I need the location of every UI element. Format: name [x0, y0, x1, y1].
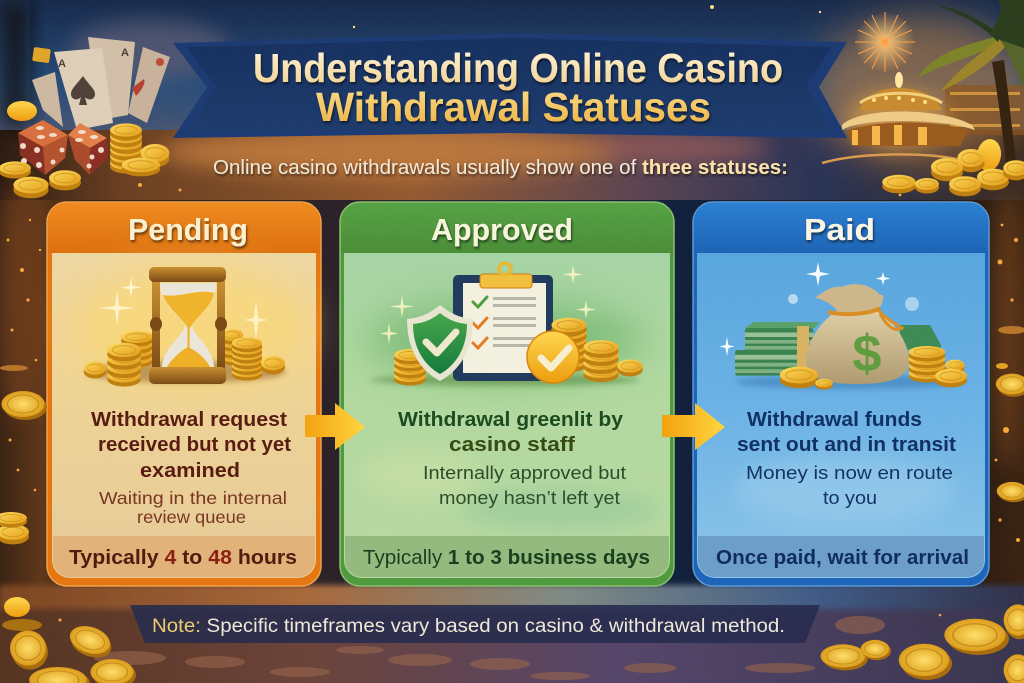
pending description: examined	[140, 460, 240, 482]
approved header	[341, 203, 673, 253]
illustration: casino building	[822, 72, 975, 163]
sparkles	[99, 277, 268, 340]
pending body background	[52, 253, 316, 578]
approved detail	[423, 462, 626, 508]
icon: money bag with cash and coins	[735, 284, 967, 390]
illustration: fireworks	[855, 12, 915, 72]
approved description: casino staff	[449, 434, 575, 456]
title text	[253, 45, 783, 130]
approved description	[398, 409, 624, 456]
pending header	[48, 203, 320, 253]
panel: pending	[47, 202, 321, 586]
approved detail: money hasn’t left yet	[439, 487, 620, 508]
paid detail: to you	[823, 487, 877, 508]
paid detail: Money is now en route	[746, 462, 953, 483]
illustration: playing cards: A	[58, 58, 66, 70]
pending timeframe: Typically 4 to 48 hours	[69, 547, 297, 569]
pending description: received but not yet	[98, 434, 291, 456]
subtitle: Online casino withdrawals usually show one of three statuses:	[213, 157, 788, 179]
pending footer band	[53, 536, 315, 577]
approved footer band	[345, 536, 669, 577]
title text: Understanding Online Casino	[253, 45, 783, 91]
approved body background	[344, 253, 670, 578]
title banner	[173, 33, 847, 138]
gold coins bottom right	[820, 604, 1024, 683]
illustration: dice	[18, 120, 108, 175]
note bar	[130, 605, 820, 643]
paid footer band	[698, 536, 984, 577]
approved description: Withdrawal greenlit by	[398, 409, 624, 431]
paid header	[694, 203, 988, 253]
paid detail	[746, 462, 953, 508]
paid heading: Paid	[804, 212, 875, 247]
side coins right	[996, 363, 1024, 502]
illustration: playing cards: A	[121, 47, 129, 59]
pending detail: review queue	[137, 507, 246, 527]
sparkles	[380, 265, 596, 344]
icon: money bag with cash and coins: $	[853, 325, 882, 383]
illustration: gold coins top right	[882, 137, 1024, 196]
illustration: palm tree	[918, 0, 1024, 162]
note text: Note: Specific timeframes vary based on casino & withdrawal method.	[152, 616, 785, 637]
arrow: approved to paid	[662, 403, 725, 450]
icon: hourglass with coins	[84, 267, 286, 387]
approved detail: Internally approved but	[423, 462, 626, 483]
approved timeframe: Typically 1 to 3 business days	[363, 547, 650, 569]
paid description: Withdrawal funds	[747, 409, 922, 431]
paid description: sent out and in transit	[737, 434, 956, 456]
illustration: gold coins top left	[0, 47, 169, 198]
panel: approved	[340, 202, 674, 586]
paid description	[737, 409, 956, 456]
side coins left	[0, 391, 47, 544]
pending heading: Pending	[128, 212, 248, 247]
paid body background	[697, 253, 985, 578]
icon: clipboard, shield and check coin	[370, 263, 643, 386]
illustration: distant hotel	[945, 85, 1024, 135]
pending description	[91, 409, 291, 482]
arrow: pending to approved	[305, 403, 365, 450]
title text: Withdrawal Statuses	[316, 84, 711, 130]
pending detail	[99, 488, 287, 527]
illustration: playing cards	[32, 37, 170, 130]
gold coins bottom left	[2, 597, 136, 683]
sparkles	[720, 262, 919, 356]
pending description: Withdrawal request	[91, 409, 287, 431]
pending detail: Waiting in the internal	[99, 488, 287, 508]
paid timeframe: Once paid, wait for arrival	[716, 547, 969, 569]
panel: paid	[693, 202, 989, 586]
approved heading: Approved	[431, 212, 573, 247]
